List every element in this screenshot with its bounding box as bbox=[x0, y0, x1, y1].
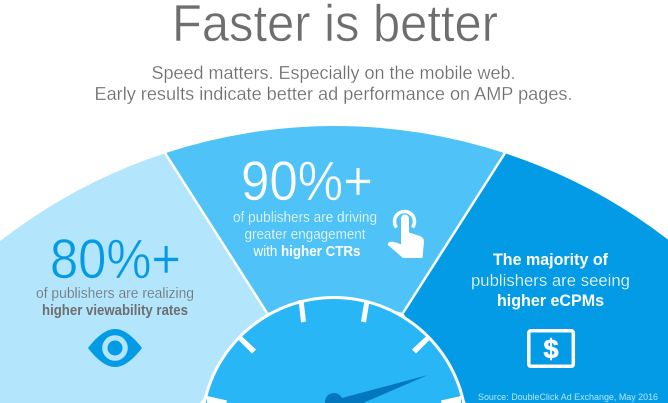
subtitle: Early results indicate better ad performance on AMP pages. bbox=[94, 83, 572, 104]
dividers bbox=[165, 153, 505, 313]
gauge needle bbox=[325, 375, 428, 403]
engagement text: of publishers are driving bbox=[233, 210, 377, 226]
subtitle bbox=[94, 62, 572, 104]
source note: Source: DoubleClick Ad Exchange, May 2016 bbox=[478, 392, 658, 403]
engagement text bbox=[233, 210, 377, 260]
viewability text bbox=[36, 286, 194, 319]
icon: eye bbox=[88, 329, 142, 367]
stat: 80%: 80%+ bbox=[50, 227, 181, 290]
icon: pointer hand bbox=[388, 212, 424, 258]
eCPM text: higher eCPMs bbox=[497, 292, 604, 310]
gauge bbox=[203, 296, 465, 403]
gauge ticks bbox=[207, 300, 461, 403]
viewability text: of publishers are realizing bbox=[36, 286, 194, 302]
panel: engagement bbox=[165, 126, 505, 313]
icon: dollar screen: $ bbox=[543, 334, 559, 364]
panel: viewability bbox=[0, 153, 267, 403]
icon: dollar screen bbox=[529, 331, 573, 366]
subtitle: Speed matters. Especially on the mobile web. bbox=[152, 62, 516, 83]
eCPM text: publishers are seeing bbox=[471, 272, 630, 290]
eCPM text: The majority of bbox=[493, 251, 608, 269]
engagement text: with higher CTRs bbox=[253, 244, 360, 260]
eCPM text bbox=[471, 251, 630, 310]
panel: eCPMs bbox=[403, 153, 668, 403]
viewability text: higher viewability rates bbox=[42, 303, 188, 319]
stat: 90%: 90%+ bbox=[241, 149, 373, 212]
engagement text: greater engagement bbox=[244, 227, 366, 243]
